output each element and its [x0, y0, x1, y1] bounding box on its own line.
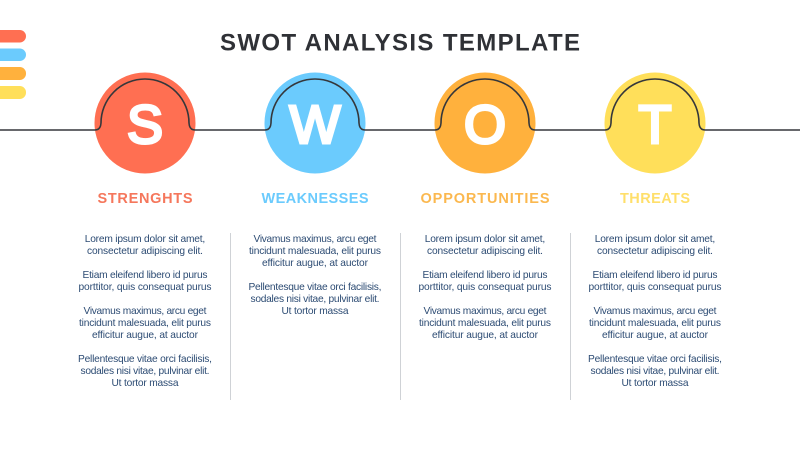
text block: strengths: [78, 234, 212, 389]
text block: weaknesses: Pellentesque vitae orci facilisis,: [248, 282, 382, 293]
text block: threats: [588, 234, 722, 389]
text block: opportunities: Etiam eleifend libero id purus: [422, 270, 548, 281]
circle T: T: [638, 95, 672, 155]
text block: opportunities: porttitor, quis consequat purus: [418, 282, 552, 293]
heading: strengths: STRENGHTS: [98, 191, 193, 207]
heading: weaknesses: WEAKNESSES: [262, 191, 369, 207]
circle S: [94, 72, 196, 174]
text block: opportunities: consectetur adipiscing elit.: [427, 246, 543, 257]
text block: strengths: Vivamus maximus, arcu eget: [84, 306, 207, 317]
text block: weaknesses: tincidunt malesuada, elit purus: [249, 246, 381, 257]
text block: opportunities: Lorem ipsum dolor sit amet,: [425, 234, 545, 245]
circle W: [264, 72, 366, 174]
circle T: [604, 72, 706, 174]
column dividers: [230, 233, 570, 400]
text block: opportunities: tincidunt malesuada, elit purus: [419, 318, 551, 329]
text block: threats: sodales nisi vitae, pulvinar elit.: [590, 366, 720, 377]
text block: threats: consectetur adipiscing elit.: [597, 246, 713, 257]
text block: strengths: tincidunt malesuada, elit purus: [79, 318, 211, 329]
text block: threats: Vivamus maximus, arcu eget: [594, 306, 717, 317]
timeline connecting line with arches: [0, 79, 800, 130]
text block: threats: Etiam eleifend libero id purus: [592, 270, 718, 281]
text block: threats: porttitor, quis consequat purus: [588, 282, 722, 293]
text block: weaknesses: sodales nisi vitae, pulvinar elit.: [250, 294, 380, 305]
text block: opportunities: efficitur augue, at auctor: [432, 330, 539, 341]
title: SWOT ANALYSIS TEMPLATE: [220, 30, 580, 56]
text block: threats: Pellentesque vitae orci facilisis,: [588, 354, 722, 365]
text block: strengths: sodales nisi vitae, pulvinar elit.: [80, 366, 210, 377]
circle O: O: [464, 95, 506, 155]
text block: opportunities: [418, 234, 552, 341]
text block: weaknesses: efficitur augue, at auctor: [262, 258, 369, 269]
text block: threats: efficitur augue, at auctor: [602, 330, 709, 341]
legend color bars: [0, 30, 26, 99]
circle S: S: [127, 95, 163, 155]
text block: threats: tincidunt malesuada, elit purus: [589, 318, 721, 329]
text block: weaknesses: Vivamus maximus, arcu eget: [254, 234, 377, 245]
text block: strengths: efficitur augue, at auctor: [92, 330, 199, 341]
heading: opportunities: OPPORTUNITIES: [420, 191, 550, 207]
text block: strengths: Lorem ipsum dolor sit amet,: [85, 234, 205, 245]
text block: threats: Lorem ipsum dolor sit amet,: [595, 234, 715, 245]
heading: threats: THREATS: [620, 191, 690, 207]
text block: strengths: porttitor, quis consequat purus: [78, 282, 212, 293]
text block: weaknesses: Ut tortor massa: [282, 306, 349, 317]
text block: strengths: consectetur adipiscing elit.: [87, 246, 203, 257]
circle O: [434, 72, 536, 174]
text block: strengths: Pellentesque vitae orci facilisis,: [78, 354, 212, 365]
text block: weaknesses: [248, 234, 382, 317]
circle W: W: [290, 95, 341, 155]
text block: strengths: Etiam eleifend libero id purus: [82, 270, 208, 281]
text block: strengths: Ut tortor massa: [112, 378, 179, 389]
text block: opportunities: Vivamus maximus, arcu eget: [424, 306, 547, 317]
text block: threats: Ut tortor massa: [622, 378, 689, 389]
